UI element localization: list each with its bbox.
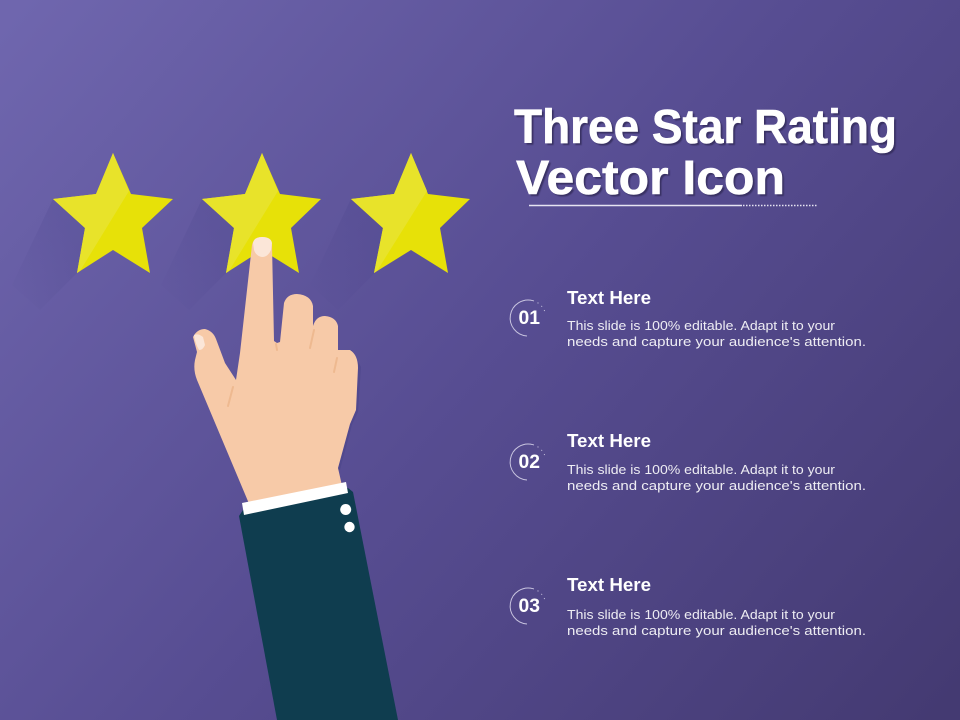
title: Vector Icon bbox=[516, 152, 785, 205]
heading 01: Text Here bbox=[567, 288, 651, 308]
icon: pointing hand bbox=[193, 237, 398, 720]
title bbox=[514, 101, 899, 207]
number badge 01: 01 bbox=[518, 308, 540, 329]
description 03 bbox=[567, 608, 866, 638]
sleeve bbox=[239, 488, 398, 720]
hand shadow bbox=[337, 350, 361, 470]
fingernails bbox=[253, 237, 272, 257]
title: Three Star Rating bbox=[516, 103, 899, 156]
title: Vector Icon bbox=[518, 154, 787, 207]
description 01: needs and capture your audience's attention. bbox=[567, 335, 866, 349]
number badge 02: 02 bbox=[518, 452, 540, 473]
item 02 bbox=[510, 431, 866, 493]
description 02: needs and capture your audience's attention. bbox=[567, 479, 866, 493]
description 02 bbox=[567, 463, 866, 493]
description 02: This slide is 100% editable. Adapt it to your bbox=[567, 463, 835, 477]
description 03: needs and capture your audience's attention. bbox=[567, 624, 866, 638]
number badge 03 bbox=[510, 588, 545, 624]
item 01 bbox=[510, 288, 866, 349]
icon: star 2 bbox=[202, 153, 321, 273]
heading 02: Text Here bbox=[567, 431, 651, 451]
shirt cuff bbox=[242, 482, 348, 515]
icon: star 3 bbox=[351, 153, 470, 273]
hand bbox=[193, 237, 358, 506]
number badge 03: 03 bbox=[518, 596, 540, 617]
cuff buttons bbox=[340, 504, 351, 515]
heading 03: Text Here bbox=[567, 575, 651, 595]
title: Three Star Rating bbox=[514, 101, 897, 154]
title underline bbox=[529, 204, 818, 206]
number badge 01 bbox=[510, 300, 545, 336]
finger creases bbox=[228, 330, 337, 406]
icon: star 1 bbox=[53, 153, 173, 273]
description 03: This slide is 100% editable. Adapt it to your bbox=[567, 608, 835, 622]
star long shadows bbox=[12, 199, 383, 310]
number badge 02 bbox=[510, 444, 545, 480]
description 01: This slide is 100% editable. Adapt it to your bbox=[567, 319, 835, 333]
item 03 bbox=[510, 575, 866, 638]
description 01 bbox=[567, 319, 866, 349]
